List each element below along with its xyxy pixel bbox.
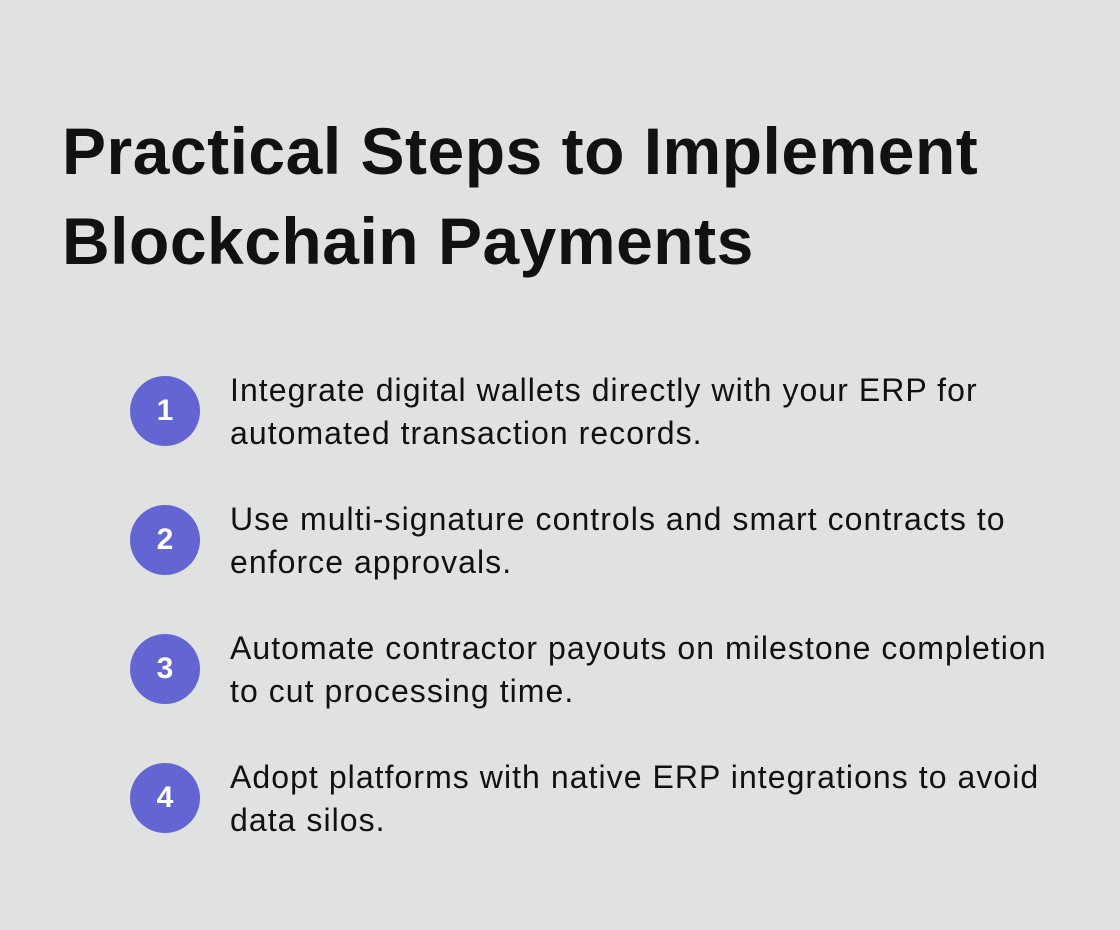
icon: number 1: 1 (157, 394, 173, 427)
step 2 (130, 501, 1006, 580)
icon: number 1 (130, 376, 200, 446)
text: step 4: Adopt platforms with native ERP integrations to avoid (230, 759, 1039, 795)
step 3 (130, 630, 1047, 709)
icon: number 4: 4 (157, 781, 173, 814)
icon: number 2: 2 (157, 523, 173, 556)
text: step 2 (230, 501, 1006, 580)
icon: number 4 (130, 763, 200, 833)
text: step 3: Automate contractor payouts on milestone completion (230, 630, 1047, 666)
text: step 1 (230, 372, 978, 451)
text: step 1: automated transaction records. (230, 415, 703, 451)
icon: number 3 (130, 634, 200, 704)
step 4 (130, 759, 1039, 838)
text: step 4 (230, 759, 1039, 838)
icon: number 2 (130, 505, 200, 575)
title: Blockchain Payments (62, 204, 754, 278)
step 1 (130, 372, 978, 451)
text: step 3: to cut processing time. (230, 673, 574, 709)
text: step 1: Integrate digital wallets directly with your ERP for (230, 372, 978, 408)
icon: number 3: 3 (157, 652, 173, 685)
text: step 4: data silos. (230, 802, 386, 838)
text: step 2: Use multi-signature controls and smart contracts to (230, 501, 1006, 537)
text: step 2: enforce approvals. (230, 544, 512, 580)
title (62, 114, 978, 278)
text: step 3 (230, 630, 1047, 709)
title: Practical Steps to Implement (62, 114, 978, 188)
